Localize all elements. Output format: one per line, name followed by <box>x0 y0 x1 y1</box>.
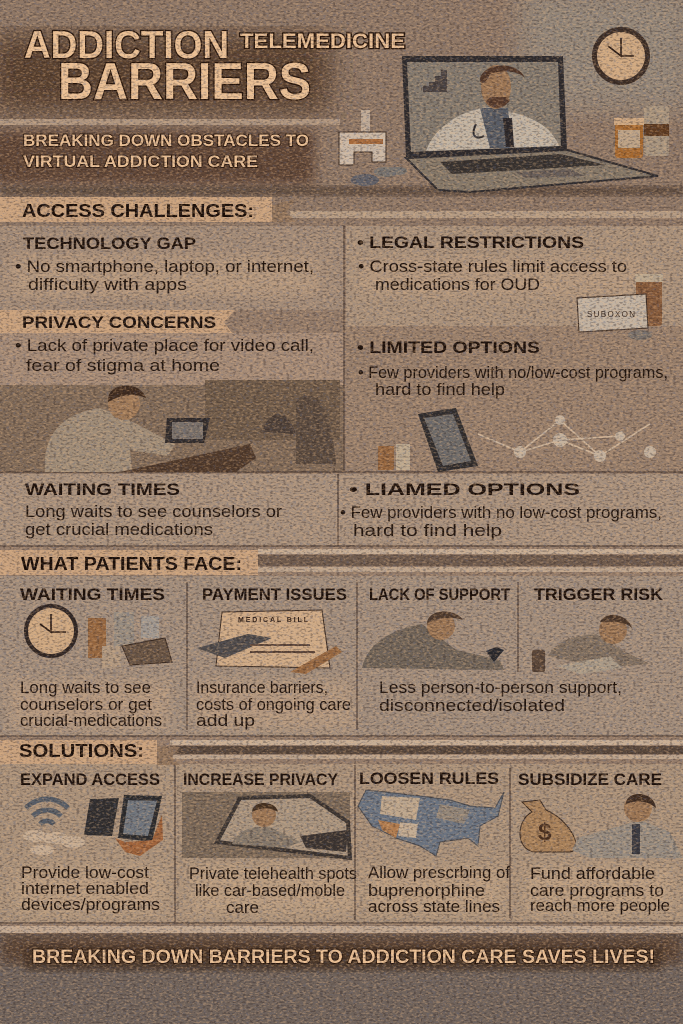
section banner: solutions: SOLUTIONS: <box>19 740 144 761</box>
text block: limited options: • LIMITED OPTIONS <box>357 338 540 357</box>
illustration: isolated man with phone <box>362 611 504 670</box>
card: trigger risk <box>532 585 664 674</box>
card: subsidize care: Fund affordable <box>530 865 655 883</box>
card: loosen rules: across state lines <box>368 898 500 916</box>
text block: technology gap: • No smartphone, laptop, or internet, <box>15 258 314 276</box>
text block: legal restrictions: medications for OUD <box>375 276 540 294</box>
card: increase privacy <box>182 770 357 917</box>
card: increase privacy: INCREASE PRIVACY <box>183 770 339 789</box>
text block: waiting times: WAITING TIMES <box>25 480 180 499</box>
icon: wifi, phones and stones <box>23 795 163 856</box>
section banner: access challenges: ACCESS CHALLENGES: <box>22 200 254 221</box>
hero illustration: doctor on laptop with clock and medications <box>339 27 669 192</box>
section banner: what patients face: WHAT PATIENTS FACE: <box>21 553 242 574</box>
icon: medical bill <box>197 610 342 674</box>
card: increase privacy: like car-based/moble <box>195 882 345 900</box>
icon: laptop with doctor <box>402 56 658 192</box>
card: waiting times: crucial-medications <box>20 712 162 730</box>
section banner: access challenges <box>0 197 683 222</box>
text block: limited options repeat: hard to find help <box>353 522 502 540</box>
text block: privacy concerns <box>0 310 314 375</box>
card: lack of support <box>362 585 622 715</box>
card: waiting times: counselors or get <box>20 696 152 714</box>
icon: small clinic and stones <box>339 110 407 186</box>
card: loosen rules: LOOSEN RULES <box>359 769 499 788</box>
card: payment issues <box>196 585 351 730</box>
card: loosen rules: buprenorphine <box>368 882 485 900</box>
illustration: man with bottle <box>532 615 650 674</box>
title <box>24 24 405 111</box>
illustration: phone and provider network <box>378 408 656 472</box>
text block: limited options repeat: • LIAMED OPTIONS <box>349 480 580 499</box>
text block: technology gap: difficulty with apps <box>28 276 187 294</box>
callout: closing message: BREAKING DOWN BARRIERS TO ADDICTION CARE SAVES LIVES! <box>32 947 655 968</box>
section banner: what patients face <box>0 549 683 575</box>
text block: limited options: hard to find help <box>375 381 505 399</box>
illustration: man in car <box>182 792 350 858</box>
icon: medical bill: MEDICAL BILL <box>238 617 309 624</box>
card: lack of support: Less person-to-person support, <box>379 679 622 697</box>
illustration: US map <box>358 790 504 856</box>
card: payment issues: costs of ongoing care <box>196 696 351 714</box>
card: subsidize care: reach more people <box>530 897 670 915</box>
card: subsidize care <box>518 770 683 915</box>
text block: limited options repeat <box>340 480 662 540</box>
title: ADDICTION <box>24 24 229 67</box>
text block: waiting times <box>25 480 283 539</box>
card: payment issues: add up <box>196 712 255 730</box>
illustration: money bag and man in suit: $ <box>538 819 552 846</box>
illustration: money bag and man in suit <box>520 794 683 858</box>
card: waiting times: Long waits to see <box>20 679 151 697</box>
subtitle: BREAKING DOWN OBSTACLES TO <box>23 131 309 150</box>
text block: limited options repeat: • Few providers with no low-cost programs, <box>340 504 662 522</box>
icon: clock and medication supplies <box>24 604 172 668</box>
text block: limited options: • Few providers with no/low-cost programs, <box>358 364 668 382</box>
text block: waiting times: Long waits to see counselors or <box>25 503 283 521</box>
title: TELEMEDICINE <box>240 30 405 53</box>
card: trigger risk: TRIGGER RISK <box>534 585 664 604</box>
panel: solutions <box>0 740 683 923</box>
text block: legal restrictions: • LEGAL RESTRICTIONS <box>357 233 584 252</box>
card: expand access: internet enabled <box>21 880 149 898</box>
text block: technology gap: TECHNOLOGY GAP <box>23 234 196 253</box>
divider strip under title <box>0 119 340 125</box>
card: loosen rules <box>358 769 510 916</box>
panel: what patients face <box>0 549 683 736</box>
text block: legal restrictions: • Cross-state rules limit access to <box>358 258 627 276</box>
card: waiting times <box>20 585 172 730</box>
text block: limited options <box>357 338 668 399</box>
card: lack of support: LACK OF SUPPORT <box>369 585 511 604</box>
text block: technology gap <box>15 234 314 294</box>
text block: privacy concerns: fear of stigma at home <box>26 357 220 375</box>
card: subsidize care: care programs to <box>530 882 664 900</box>
text block: privacy concerns: PRIVACY CONCERNS <box>22 313 216 332</box>
illustration: man at tablet in a room <box>45 380 340 472</box>
card: expand access <box>20 770 163 914</box>
text block: privacy concerns: • Lack of private place for video call, <box>15 337 314 355</box>
card: loosen rules: Allow prescrbing of <box>368 864 510 882</box>
section banner: solutions <box>0 740 683 765</box>
card: payment issues: PAYMENT ISSUES <box>202 585 347 604</box>
panel: access challenges <box>0 197 683 546</box>
icon: suboxone box and bottle <box>577 274 663 340</box>
card: increase privacy: care <box>226 899 259 917</box>
card: expand access: devices/programs <box>21 896 160 914</box>
icon: pill bottles <box>614 106 669 158</box>
card: waiting times: WAITING TIMES <box>20 585 165 604</box>
subtitle <box>23 131 309 171</box>
card: lack of support: disconnected/isolated <box>379 697 565 715</box>
card: payment issues: Insurance barriers, <box>196 679 328 697</box>
subtitle: VIRTUAL ADDICTION CARE <box>23 152 258 171</box>
icon: wall clock <box>592 27 650 85</box>
card: increase privacy: Private telehealth spots <box>189 865 357 883</box>
text block: legal restrictions <box>357 233 627 294</box>
divider strip above call to action <box>0 926 683 933</box>
icon: suboxone box and bottle: SUBOXON <box>587 310 635 319</box>
text block: waiting times: get crucial medications <box>25 521 213 539</box>
card: expand access: EXPAND ACCESS <box>20 770 160 789</box>
card: expand access: Provide low-cost <box>21 864 149 882</box>
card: subsidize care: SUBSIDIZE CARE <box>518 770 662 789</box>
title: BARRIERS <box>58 53 311 111</box>
